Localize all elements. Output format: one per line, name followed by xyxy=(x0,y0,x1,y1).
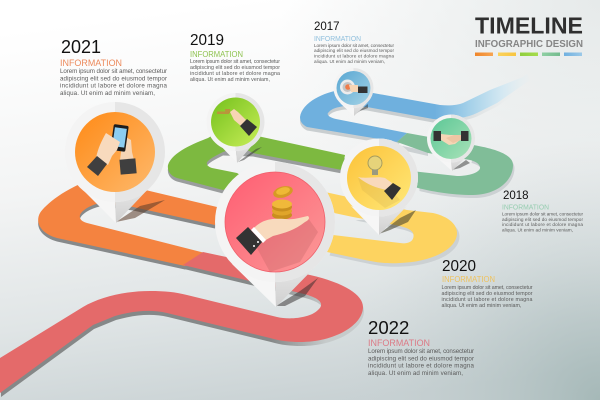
text block: 2020: Lorem ipsum dolor sit amet, consectetur xyxy=(442,285,533,291)
text block: 2018: INFORMATION xyxy=(502,204,549,212)
text block: 2021: incididunt ut labore et dolore magna xyxy=(60,82,168,89)
icon: hand holding coins xyxy=(236,184,318,272)
text block: 2022: aliqua. Ut enim ad minim veniam, xyxy=(368,370,463,377)
pin: 2018 handshake xyxy=(427,114,475,171)
icon: hands holding phone xyxy=(87,124,137,176)
road: green segment xyxy=(168,128,345,194)
subheading: INFOGRAPHIC DESIGN xyxy=(475,38,583,50)
pin: 2021 smartphone xyxy=(65,102,165,223)
text block: 2018: Lorem ipsum dolor sit amet, consectetur xyxy=(502,211,583,216)
road: red segment xyxy=(0,252,364,397)
text block: 2022: INFORMATION xyxy=(368,338,430,348)
text block: 2021 xyxy=(60,37,168,97)
icon: handshake xyxy=(434,131,468,145)
text block: 2018: 2018 xyxy=(503,190,529,202)
text block: 2019: incididunt ut labore et dolore magna xyxy=(190,71,280,77)
pin: 2017 target xyxy=(334,68,374,116)
text block: 2020: incididunt ut labore et dolore magna xyxy=(442,297,533,303)
text block: 2017: Lorem ipsum dolor sit amet, consectetur xyxy=(314,43,394,48)
text block: 2018: incididunt ut labore et dolore magna xyxy=(502,222,583,227)
text block: 2022: adipiscing elit sed do eiusmod tempor xyxy=(368,355,474,362)
text block: 2019: aliqua. Ut enim ad minim veniam, xyxy=(190,77,270,83)
icon: hand holding key xyxy=(217,109,257,136)
text block: 2021: Lorem ipsum dolor sit amet, consectetur xyxy=(60,68,167,75)
text block: 2019 xyxy=(190,32,280,83)
text block: 2019: 2019 xyxy=(190,32,224,49)
text block: 2020: aliqua. Ut enim ad minim veniam, xyxy=(442,303,522,309)
text block: 2017: incididunt ut labore et dolore magna xyxy=(314,54,394,58)
text block: 2019: Lorem ipsum dolor sit amet, consectetur xyxy=(190,59,280,65)
pin: 2020 light bulb xyxy=(340,138,418,235)
road: blue segment xyxy=(300,74,530,146)
text block: 2020: 2020 xyxy=(442,258,476,275)
text block: 2017: 2017 xyxy=(314,21,340,33)
title block xyxy=(475,12,583,56)
text block: 2022: incididunt ut labore et dolore magna xyxy=(368,363,475,370)
colour legend bars xyxy=(475,52,582,56)
text block: 2020 xyxy=(442,258,533,309)
text block: 2019: adipiscing elit sed do eiusmod tempor xyxy=(190,65,280,71)
text block: 2017: aliqua. Ut enim ad minim veniam, xyxy=(314,59,385,64)
text block: 2022 xyxy=(368,317,475,377)
icon: target and hand xyxy=(340,80,368,94)
text block: 2019: INFORMATION xyxy=(190,50,243,59)
road: yellow segment xyxy=(320,192,460,267)
text block: 2021: aliqua. Ut enim ad minim veniam, xyxy=(60,90,155,97)
road: orange segment xyxy=(38,178,217,270)
pin: 2019 key xyxy=(206,93,264,163)
heading: timeline: TIMELINE xyxy=(475,12,583,38)
text block: 2017: adipiscing elit sed do eiusmod tempor xyxy=(314,48,394,53)
text block: 2020: adipiscing elit sed do eiusmod tempor xyxy=(442,291,533,297)
pin: 2022 coins in hand xyxy=(215,162,335,307)
road: teal segment xyxy=(397,133,514,198)
text block: 2021: INFORMATION xyxy=(60,58,122,68)
text block: 2018: aliqua. Ut enim ad minim veniam, xyxy=(502,228,573,233)
text block: 2017 xyxy=(314,21,394,64)
text block: 2021: 2021 xyxy=(61,37,101,57)
text block: 2020: INFORMATION xyxy=(442,275,495,284)
text block: 2018: adipiscing elit sed do eiusmod tempor xyxy=(502,217,583,222)
text block: 2017: INFORMATION xyxy=(314,36,361,43)
text block: 2022: Lorem ipsum dolor sit amet, consectetur xyxy=(368,348,474,355)
text block: 2018 xyxy=(502,190,583,233)
text block: 2021: adipiscing elit sed do eiusmod tempor xyxy=(60,75,167,82)
icon: hand and light bulb xyxy=(358,156,401,208)
text block: 2022: 2022 xyxy=(368,317,409,338)
